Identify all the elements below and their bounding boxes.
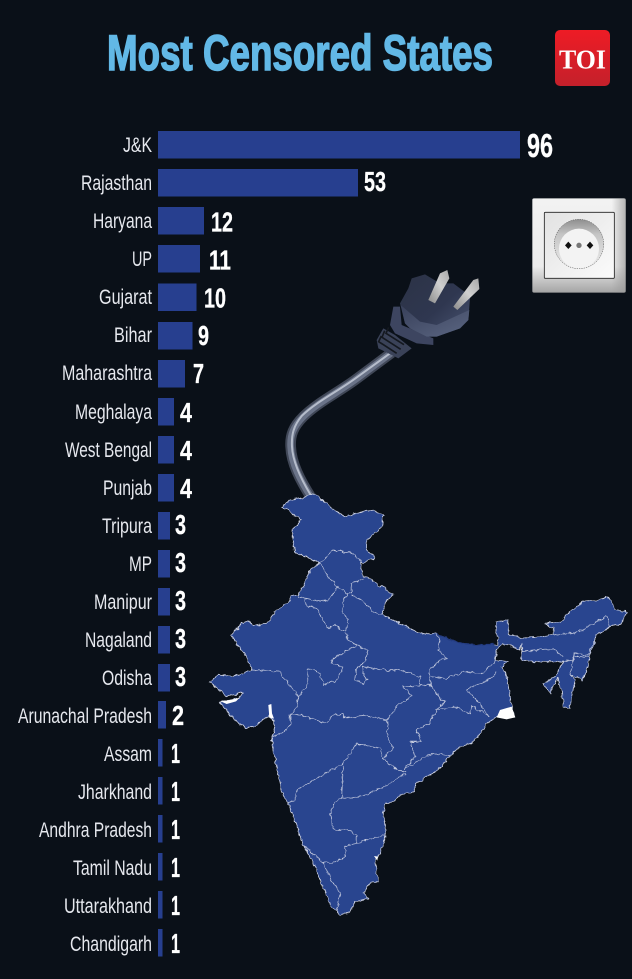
row: Gujarat: Gujarat <box>99 285 152 309</box>
plug body <box>400 274 470 337</box>
row: J&K: J&K <box>123 133 152 157</box>
row: Manipur: Manipur <box>94 590 152 614</box>
plug strain relief <box>377 328 412 358</box>
row: Punjab: Punjab <box>103 476 152 500</box>
row: Assam: 1 <box>171 738 180 769</box>
row: UP <box>132 244 231 276</box>
row: Punjab: 4 <box>180 473 192 504</box>
map: country shape <box>209 494 627 915</box>
row: Bihar: 9 <box>198 320 209 351</box>
row: West Bengal: West Bengal <box>65 438 152 462</box>
row: Rajasthan: 53 <box>364 166 386 197</box>
row: Andhra Pradesh: 1 <box>171 814 180 845</box>
row: Arunachal Pradesh: Arunachal Pradesh <box>18 704 152 728</box>
row: Rajasthan: Rajasthan <box>81 171 152 195</box>
row: UP: 11 <box>209 244 231 276</box>
row: Chandigarh: Chandigarh <box>70 932 152 956</box>
row: Manipur <box>94 585 186 616</box>
row: Nagaland: Nagaland <box>85 628 152 652</box>
row: Meghalaya <box>75 397 192 428</box>
row: Assam: Assam <box>104 742 152 766</box>
title: Most Censored States <box>107 25 493 81</box>
row: Maharashtra <box>62 358 204 389</box>
row: Jharkhand: Jharkhand <box>78 780 152 804</box>
row: Gujarat <box>99 282 226 314</box>
row: Tripura: Tripura <box>102 514 152 538</box>
row: Tamil Nadu: 1 <box>171 852 180 883</box>
row: Uttarakhand: Uttarakhand <box>64 894 152 918</box>
row: Tripura <box>102 509 186 540</box>
row: Haryana: 12 <box>211 206 233 238</box>
row: Haryana <box>93 206 233 238</box>
row: Chandigarh: 1 <box>171 928 180 959</box>
row: Bihar <box>114 320 209 351</box>
row: Punjab <box>103 473 192 504</box>
row: Maharashtra: 7 <box>193 358 204 389</box>
row: Haryana: Haryana <box>93 209 152 233</box>
icon: power plug and cable <box>291 270 479 498</box>
map of India <box>209 494 627 915</box>
map: state borders <box>252 550 609 912</box>
row: Gujarat: 10 <box>204 282 226 314</box>
row: Nagaland: 3 <box>175 623 186 654</box>
row: Arunachal Pradesh: 2 <box>172 700 184 731</box>
row: UP: UP <box>132 247 152 271</box>
map: Nepal border segment <box>437 634 495 645</box>
logo: TOI <box>555 30 610 86</box>
bar chart: censored states <box>18 127 553 959</box>
row: Uttarakhand: 1 <box>171 890 180 921</box>
row: Manipur: 3 <box>175 585 186 616</box>
row: Odisha: 3 <box>175 661 186 692</box>
row: Assam <box>104 738 180 769</box>
row: West Bengal: 4 <box>180 435 192 466</box>
row: Meghalaya: Meghalaya <box>75 400 152 424</box>
row: Andhra Pradesh: Andhra Pradesh <box>39 818 152 842</box>
row: MP: 3 <box>175 547 186 578</box>
row: J&K: 96 <box>527 127 553 164</box>
cable <box>291 353 392 498</box>
plug body lower face <box>401 305 469 337</box>
row: MP <box>129 547 186 578</box>
row: Rajasthan <box>81 166 386 197</box>
row: MP: MP <box>129 552 152 576</box>
row: J&K <box>123 127 553 164</box>
row: Jharkhand: 1 <box>171 776 180 807</box>
plug collar <box>390 307 433 345</box>
icon: wall socket <box>532 198 626 293</box>
row: Tamil Nadu: Tamil Nadu <box>73 856 152 880</box>
row: Maharashtra: Maharashtra <box>62 361 152 385</box>
map: white coastal patches <box>212 683 515 861</box>
logo: TOI: TOI <box>559 44 606 74</box>
plug prongs <box>428 270 449 303</box>
row: Bihar: Bihar <box>114 323 152 347</box>
row: Odisha <box>102 661 186 692</box>
row: Meghalaya: 4 <box>180 397 192 428</box>
row: Odisha: Odisha <box>102 666 152 690</box>
row: Tripura: 3 <box>175 509 186 540</box>
